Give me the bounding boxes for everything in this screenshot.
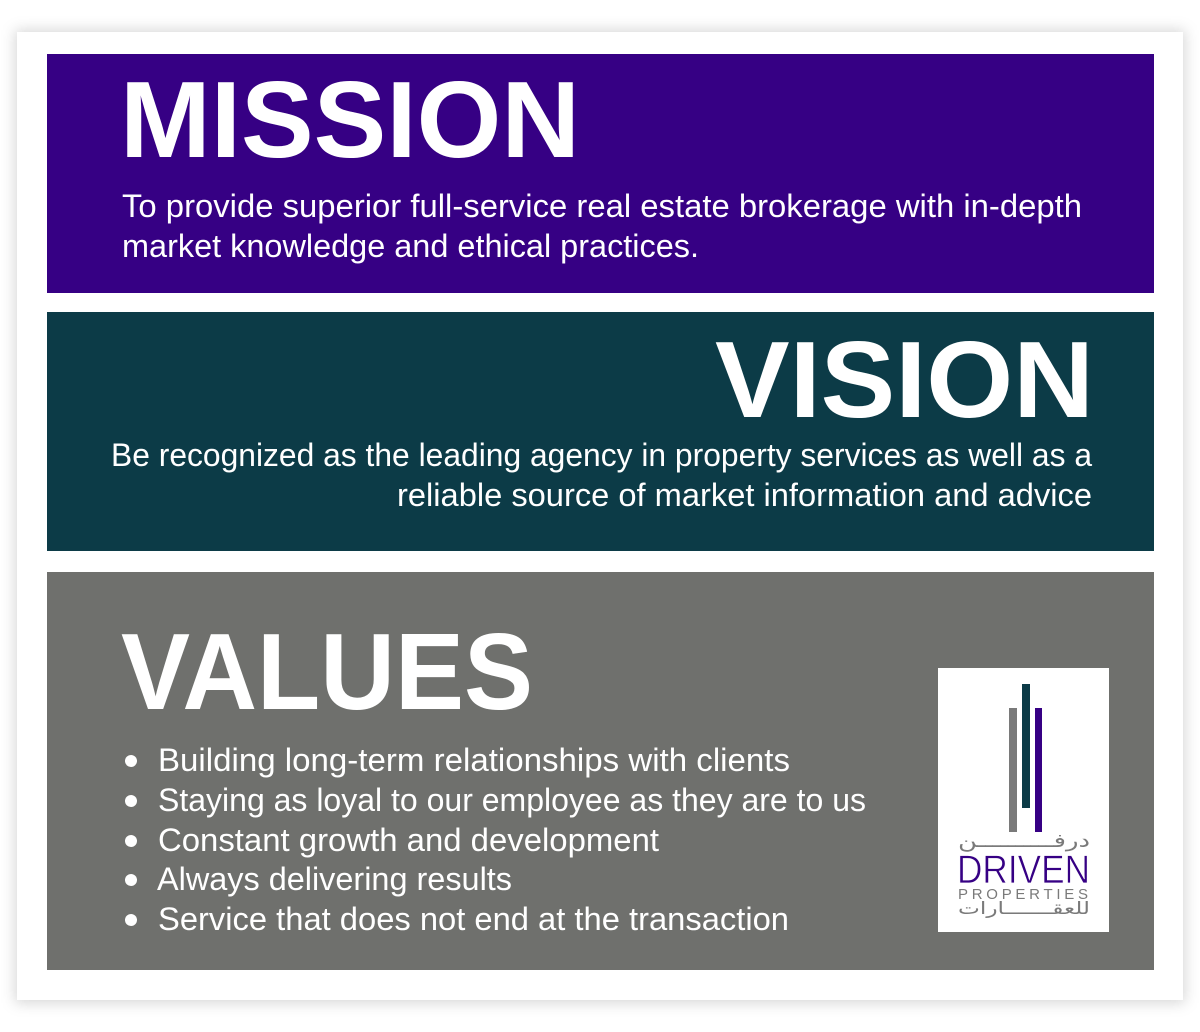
list: values (125, 742, 866, 937)
panel: values (47, 572, 1154, 970)
logo subtitle: PROPERTIES (958, 886, 1088, 903)
text: mission statement: To provide superior full-service real estate brokerage with in-depth (122, 188, 1082, 224)
logo: Driven Properties (938, 668, 1109, 932)
list: values: Building long-term relationships with clients (158, 742, 790, 778)
panel: mission (47, 54, 1154, 293)
list: values: Constant growth and development (158, 822, 659, 858)
text: mission statement: market knowledge and ethical practices. (122, 228, 699, 264)
list: values: Always delivering results (157, 861, 512, 897)
heading: values: VALUES (121, 611, 533, 733)
logo Arabic name: درفــــــــــن (958, 830, 1090, 852)
logo wordmark: DRIVEN (957, 848, 1090, 892)
text: mission statement (122, 188, 1082, 264)
logo Arabic subtitle: للعقـــــــارات (958, 899, 1090, 919)
list: values: Service that does not end at the transaction (158, 901, 789, 937)
text: vision statement (111, 437, 1092, 513)
icon: three vertical bars (1009, 684, 1042, 832)
heading: mission: MISSION (120, 59, 580, 181)
list: values: Staying as loyal to our employee as they are to us (158, 782, 866, 818)
text: vision statement: Be recognized as the leading agency in property services as well as a (111, 437, 1092, 473)
panel: vision (47, 312, 1154, 551)
text: vision statement: reliable source of market information and advice (397, 477, 1092, 513)
heading: vision: VISION (715, 319, 1094, 441)
